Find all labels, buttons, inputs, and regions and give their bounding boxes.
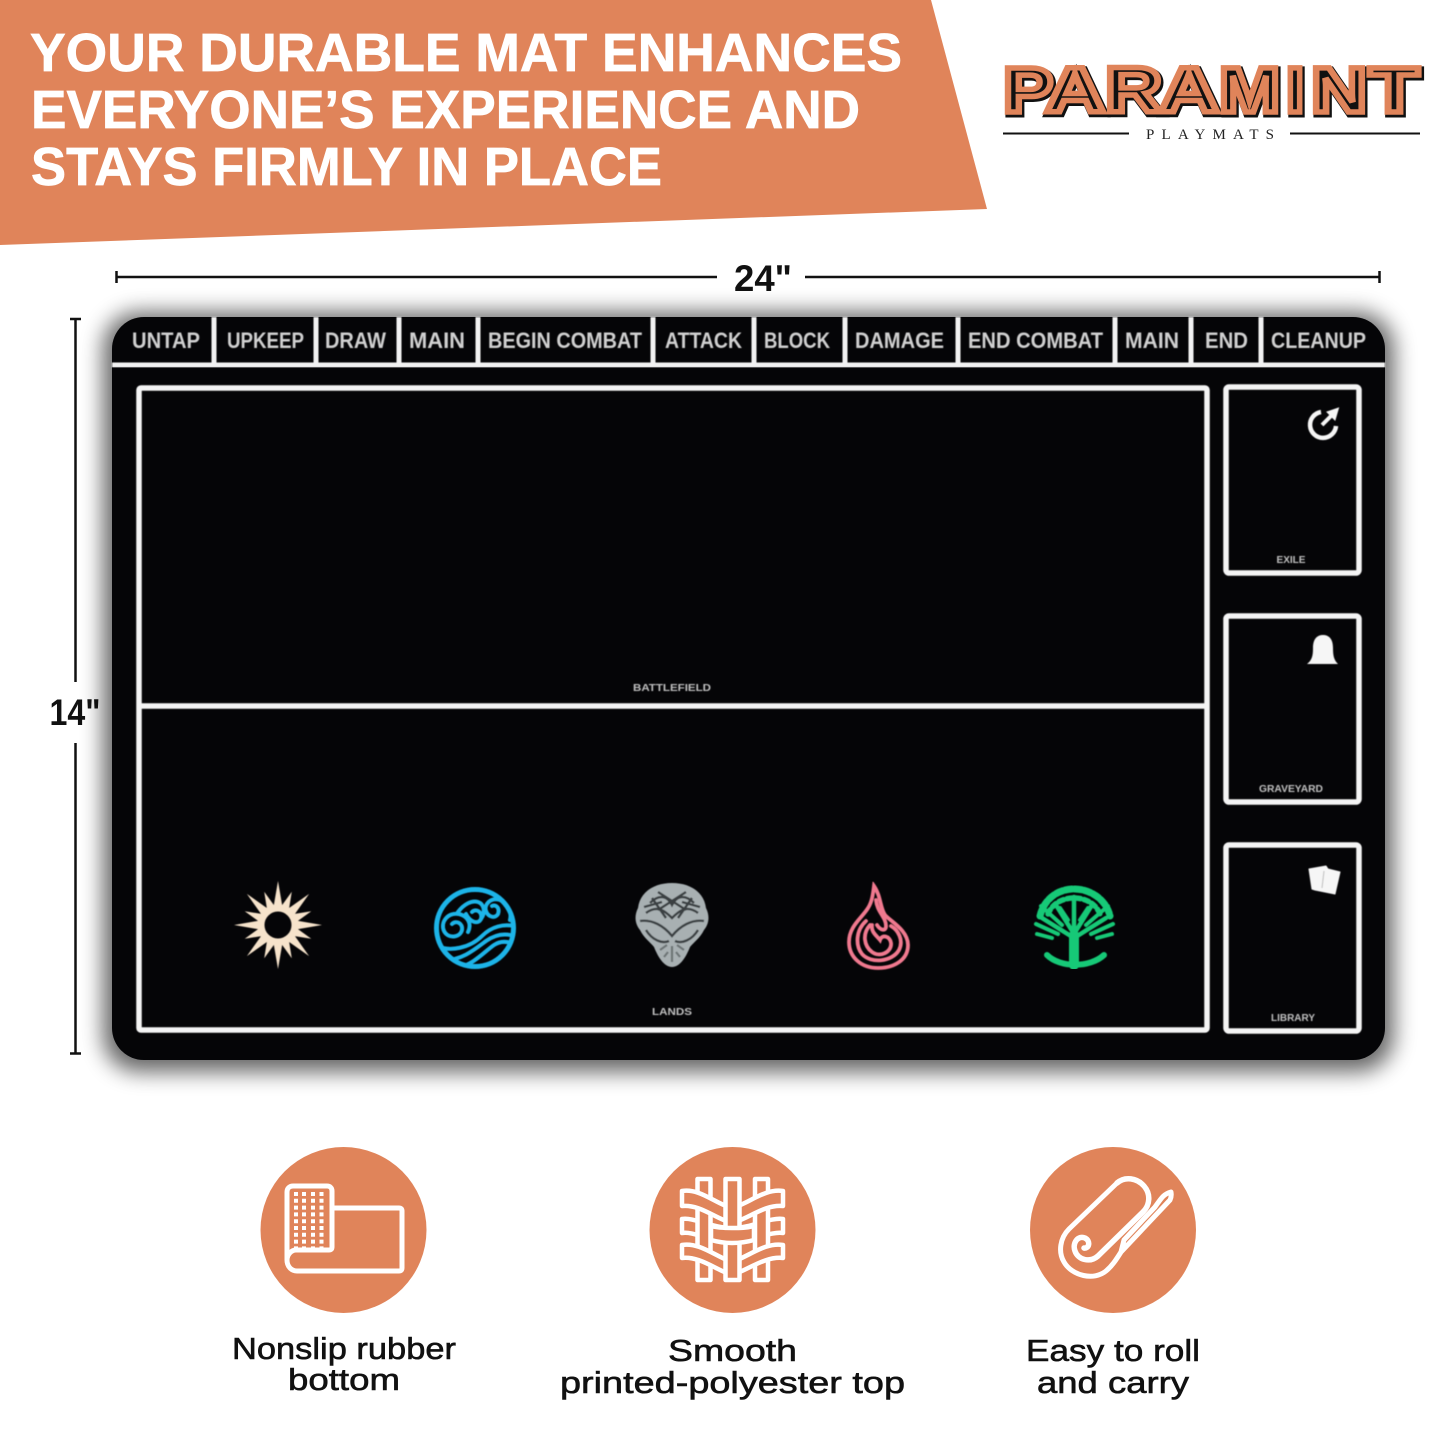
headline: EVERYONE’S EXPERIENCE AND: [31, 80, 860, 140]
logo: Paramint Playmats: M: [1219, 54, 1280, 126]
caption: Nonslip rubber: [232, 1331, 456, 1366]
icon: air skull emblem: [636, 883, 708, 967]
phase bar: UPKEEP: [227, 328, 304, 353]
logo: Paramint Playmats: I: [1288, 56, 1306, 128]
phase bar: END COMBAT: [968, 328, 1104, 353]
battlefield and lands frame: [139, 388, 1207, 1030]
graveyard zone: [1226, 616, 1359, 802]
logo: Paramint Playmats: T: [1369, 54, 1419, 126]
phase bar: ATTACK: [665, 328, 742, 353]
caption: [1026, 1333, 1200, 1400]
phase bar: BEGIN COMBAT: [488, 328, 642, 353]
feature: nonslip rubber bottom: [232, 1147, 456, 1397]
headline: YOUR DURABLE MAT ENHANCES: [30, 23, 902, 83]
phase bar: UNTAP: [132, 328, 200, 353]
exile zone: EXILE: [1276, 555, 1306, 566]
caption: [560, 1333, 905, 1400]
icon: rolled mat: [1030, 1147, 1196, 1313]
phase bar: END: [1205, 328, 1248, 353]
icon: fire emblem: [849, 886, 908, 968]
caption: bottom: [288, 1362, 400, 1397]
caption: Easy to roll: [1026, 1333, 1200, 1368]
phase bar: MAIN: [1125, 328, 1179, 353]
width dimension: 24 inches: [116, 258, 1380, 299]
phase bar: [112, 317, 1385, 365]
phase bar: DRAW: [325, 328, 386, 353]
phase bar: BLOCK: [764, 328, 830, 353]
graveyard zone: GRAVEYARD: [1259, 784, 1323, 795]
icon: rolled mat with rubber grip: [260, 1147, 426, 1313]
logo: Paramint Playmats: A: [1046, 56, 1106, 128]
logo: Paramint Playmats: P: [1004, 56, 1054, 128]
logo: Paramint Playmats: R: [1106, 56, 1164, 128]
icon: water emblem: [436, 890, 514, 968]
caption: printed-polyester top: [560, 1365, 905, 1400]
exile zone: [1226, 387, 1359, 573]
logo: Paramint Playmats: A: [1160, 56, 1220, 128]
logo: Paramint Playmats: R: [1105, 54, 1162, 126]
header banner: [0, 0, 987, 245]
height dimension: 14 inches: [50, 319, 100, 1054]
library zone: [1226, 845, 1359, 1031]
headline: [30, 23, 902, 197]
battlefield and lands frame: LANDS: [652, 1007, 692, 1018]
icon: woven fabric: [650, 1147, 816, 1313]
logo: Paramint Playmats: T: [1370, 56, 1420, 128]
width dimension: 24 inches: 24": [734, 258, 792, 299]
feature: smooth printed polyester top: [560, 1147, 905, 1400]
logo: Paramint Playmats: [1003, 54, 1420, 143]
phase bar: CLEANUP: [1271, 328, 1366, 353]
headline: STAYS FIRMLY IN PLACE: [31, 137, 662, 197]
logo: Paramint Playmats: M: [1220, 56, 1282, 128]
playmat: [112, 317, 1385, 1060]
logo: Paramint Playmats: N: [1312, 56, 1368, 128]
battlefield and lands frame: BATTLEFIELD: [633, 683, 711, 694]
logo: Paramint Playmats: A: [1159, 54, 1219, 126]
caption: [232, 1331, 456, 1397]
icon: sun emblem: [234, 881, 322, 969]
logo: Paramint Playmats: PLAYMATS: [1146, 127, 1274, 143]
mat drop shadow: [103, 312, 1394, 1072]
logo: Paramint Playmats: I: [1286, 54, 1304, 126]
phase bar: MAIN: [409, 328, 465, 353]
caption: Smooth: [668, 1333, 797, 1368]
logo: Paramint Playmats: A: [1045, 54, 1105, 126]
height dimension: 14 inches: 14": [50, 692, 100, 733]
feature: easy to roll and carry: [1026, 1147, 1200, 1400]
phase bar: DAMAGE: [855, 328, 944, 353]
logo: Paramint Playmats: N: [1311, 54, 1367, 126]
logo: Paramint Playmats: P: [1003, 54, 1053, 126]
caption: and carry: [1037, 1365, 1190, 1400]
icon: earth tree emblem: [1036, 889, 1113, 965]
library zone: LIBRARY: [1271, 1013, 1315, 1024]
